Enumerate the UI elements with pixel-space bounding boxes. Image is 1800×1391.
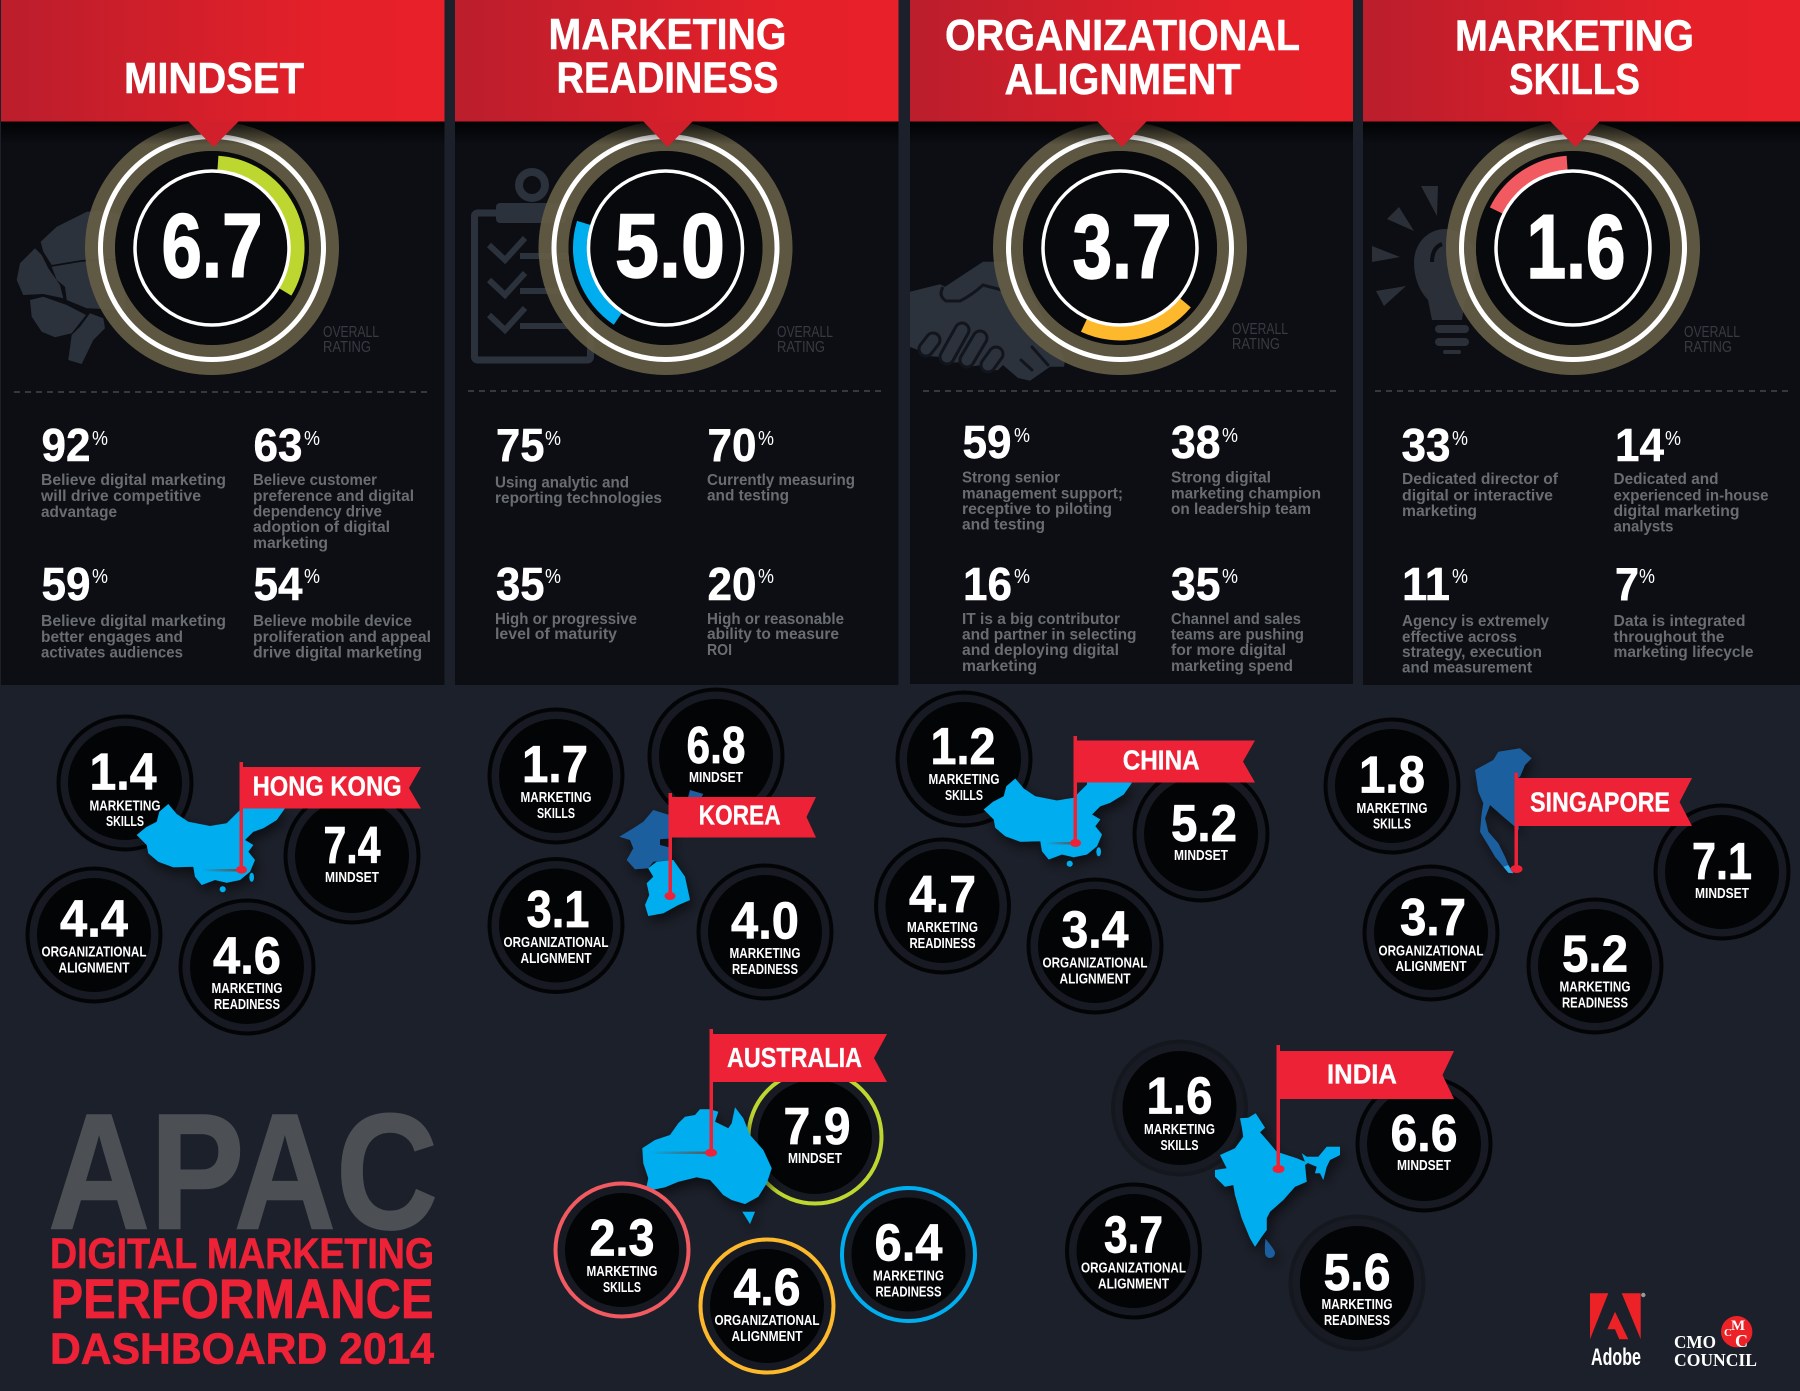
badge: marketing readiness 6.4: MARKETING <box>873 1268 944 1284</box>
stat: 63%: adoption of digital <box>253 519 390 536</box>
stat: 35% <box>495 558 637 643</box>
stat: 59%: Strong senior <box>962 470 1060 486</box>
stat: 38%: 38 <box>1171 416 1220 468</box>
badge: organizational alignment 4.4: 4.4 <box>60 890 128 948</box>
flag: China <box>1070 736 1255 847</box>
badge: marketing skills 1.4: 1.4 <box>90 744 157 802</box>
stat: 20%: % <box>758 566 774 588</box>
badge: marketing readiness 4.6: READINESS <box>214 997 280 1013</box>
panel: marketing readiness <box>455 0 898 685</box>
badge: marketing skills 1.6: MARKETING <box>1144 1122 1215 1138</box>
stat: 59%: better engages and <box>41 629 183 646</box>
badge: organizational alignment 3.7 <box>1362 864 1500 1002</box>
badge: organizational alignment 3.7: ORGANIZATIONAL <box>1081 1260 1186 1276</box>
stat: 20%: ability to measure <box>707 626 839 643</box>
badge: marketing skills 2.3: 2.3 <box>590 1210 654 1268</box>
stat: 16%: % <box>1014 566 1030 588</box>
stat: 11% <box>1402 558 1549 676</box>
overall rating label: RATING <box>777 339 825 356</box>
country: China <box>874 690 1270 1014</box>
stat: 63%: dependency drive <box>253 504 382 520</box>
badge: organizational alignment 3.1 <box>488 857 624 994</box>
stat: 70%: 70 <box>708 419 756 471</box>
rating gauge: 1.6: 1.6 <box>1526 197 1626 298</box>
overall rating label: RATING <box>323 339 371 356</box>
header: marketing skills: MARKETING <box>1455 12 1694 60</box>
country: Hong Kong <box>26 714 421 1036</box>
logo: CMO Council <box>1674 1316 1757 1370</box>
flag: Singapore: SINGAPORE <box>1530 787 1670 818</box>
badge: marketing skills 2.3 <box>554 1182 690 1318</box>
stat: 92%: % <box>92 428 108 450</box>
badge: mindset 6.6: 6.6 <box>1390 1105 1458 1163</box>
stat: 70%: and testing <box>707 488 789 504</box>
panel: organizational alignment <box>910 0 1353 684</box>
badge: organizational alignment 3.7: 3.7 <box>1400 889 1466 947</box>
title: APAC: APAC <box>48 1080 438 1264</box>
stat: 63%: preference and digital <box>253 488 414 505</box>
badge: mindset 5.2: MINDSET <box>1174 848 1228 864</box>
stat: 38%: % <box>1222 425 1238 447</box>
stat: 54%: 54 <box>254 558 303 610</box>
stat: 38% <box>1171 416 1321 518</box>
overall rating label: OVERALL <box>1232 321 1288 338</box>
badge: marketing skills 1.4: SKILLS <box>106 814 144 830</box>
badge: marketing readiness 4.0: 4.0 <box>731 892 799 950</box>
badge: marketing readiness 6.4: 6.4 <box>874 1214 943 1272</box>
overall rating label: OVERALL <box>323 324 379 341</box>
stat: 14%: analysts <box>1614 518 1674 536</box>
logo: Adobe <box>1590 1293 1646 1371</box>
flag: Hong Kong: HONG KONG <box>253 770 402 802</box>
badge: organizational alignment 4.4: ALIGNMENT <box>58 960 130 976</box>
badge: marketing skills 1.8: 1.8 <box>1359 746 1425 804</box>
stat: 35%: for more digital <box>1171 642 1286 659</box>
stat: 33% <box>1402 419 1559 520</box>
badge: organizational alignment 3.4: ALIGNMENT <box>1060 972 1131 988</box>
badge: mindset 7.1 <box>1654 804 1790 940</box>
badge: marketing readiness 5.6: 5.6 <box>1324 1244 1390 1302</box>
badge: mindset 6.8: 6.8 <box>686 717 746 775</box>
stat: 16% <box>962 558 1136 675</box>
badge: marketing readiness 4.6: 4.6 <box>213 928 281 986</box>
badge: organizational alignment 3.7: ALIGNMENT <box>1098 1276 1169 1292</box>
badge: marketing readiness 4.7: MARKETING <box>907 920 978 936</box>
badge: organizational alignment 3.1: 3.1 <box>526 881 590 939</box>
stat: 14%: % <box>1665 428 1681 450</box>
stat: 35%: % <box>1222 566 1238 588</box>
stat: 54%: proliferation and appeal <box>253 629 431 646</box>
panel: marketing skills <box>1363 0 1800 685</box>
map: India <box>1215 1113 1340 1258</box>
country: Korea <box>488 688 834 1000</box>
badge: marketing skills 1.6: SKILLS <box>1160 1138 1199 1154</box>
badge: mindset 7.4: 7.4 <box>323 817 381 875</box>
badge: organizational alignment 3.4 <box>1026 878 1164 1014</box>
badge: marketing readiness 4.6 <box>178 898 316 1036</box>
stat: 92%: Believe digital marketing <box>41 472 226 489</box>
stat: 92%: advantage <box>41 504 117 521</box>
stat: 54%: % <box>304 566 320 588</box>
logo: CMO Council: CMO <box>1674 1332 1716 1352</box>
stat: 16%: IT is a big contributor <box>962 611 1120 628</box>
badge: marketing skills 1.8: SKILLS <box>1373 816 1411 832</box>
map: China <box>984 778 1132 867</box>
badge: marketing skills 1.6 <box>1111 1040 1248 1176</box>
stat: 59%: receptive to piloting <box>962 501 1112 518</box>
stat: 59%: 59 <box>42 558 90 610</box>
header: marketing skills: SKILLS <box>1509 55 1640 104</box>
badge: organizational alignment 4.6 <box>698 1238 836 1374</box>
stat: 20% <box>707 558 844 659</box>
map: Korean peninsula <box>619 790 703 916</box>
stat: 35%: Channel and sales <box>1171 611 1301 628</box>
stat: 75%: Using analytic and <box>495 474 629 492</box>
badge: organizational alignment 4.6: ALIGNMENT <box>732 1329 803 1345</box>
stat: 38%: Strong digital <box>1171 470 1271 486</box>
stat: 59%: 59 <box>962 416 1012 468</box>
country: Singapore <box>1324 718 1790 1034</box>
badge: mindset 7.4: MINDSET <box>325 870 379 886</box>
panel: mindset <box>1 0 444 685</box>
country: Australia <box>554 1029 977 1374</box>
stat: 20%: ROI <box>707 642 732 659</box>
badge: mindset 7.1: 7.1 <box>1692 833 1752 891</box>
badge: marketing readiness 5.6: READINESS <box>1324 1313 1390 1329</box>
stat: 92% <box>40 419 226 521</box>
badge: marketing skills 1.7 <box>488 708 624 844</box>
badge: mindset 7.4 <box>284 788 420 924</box>
badge: marketing readiness 4.7 <box>874 838 1011 974</box>
stat: 7% <box>1614 558 1754 661</box>
stat: 70%: Currently measuring <box>707 472 855 489</box>
stat: 59%: activates audiences <box>41 644 183 662</box>
header: organizational alignment: ORGANIZATIONAL <box>945 11 1300 60</box>
icon: handshake <box>910 262 1065 381</box>
rating gauge: 3.7: 3.7 <box>1072 197 1172 298</box>
header: mindset: MINDSET <box>124 54 304 103</box>
badge: marketing skills 2.3: MARKETING <box>586 1264 658 1280</box>
badge: mindset 5.2: 5.2 <box>1171 795 1237 853</box>
badge: organizational alignment 3.7: ORGANIZATIONAL <box>1378 944 1484 960</box>
stat: 38%: marketing champion <box>1171 486 1321 502</box>
badge: marketing readiness 6.4: READINESS <box>876 1284 942 1300</box>
badge: marketing readiness 4.0: READINESS <box>732 962 798 978</box>
flag: Korea: KOREA <box>699 800 781 830</box>
stat: 20%: 20 <box>708 558 756 610</box>
stat: 35%: level of maturity <box>495 626 617 643</box>
badge: marketing skills 1.2 <box>896 690 1032 828</box>
badge: mindset 6.8 <box>648 688 784 824</box>
badge: organizational alignment 4.4: ORGANIZATIONAL <box>42 944 147 960</box>
icon: clipboard <box>474 172 590 360</box>
badge: marketing readiness 4.6: MARKETING <box>212 981 282 997</box>
badge: marketing readiness 4.0: MARKETING <box>730 946 800 962</box>
overall rating label <box>1232 321 1288 353</box>
icon: light bulb <box>1372 186 1476 354</box>
stat: 54%: Believe mobile device <box>253 613 412 630</box>
badge: organizational alignment 3.7: ALIGNMENT <box>1396 959 1467 975</box>
stat: 35%: % <box>545 566 561 588</box>
stat: 7%: % <box>1639 566 1655 588</box>
stat: 59%: % <box>1014 425 1030 447</box>
stat: 35%: 35 <box>496 558 544 610</box>
map: Thailand and Malay peninsula <box>1475 748 1532 873</box>
stat: 7%: throughout the <box>1614 629 1725 646</box>
badge: organizational alignment 3.1: ORGANIZATIONAL <box>504 935 609 951</box>
map pin shadow line <box>202 869 238 872</box>
badge: marketing readiness 6.4 <box>840 1186 977 1323</box>
flag: Australia: AUSTRALIA <box>727 1042 862 1073</box>
stat: 59% <box>962 416 1123 534</box>
stat: 14%: Dedicated and <box>1614 471 1718 488</box>
flag: Hong Kong <box>236 762 421 874</box>
badge: organizational alignment 3.4: ORGANIZATIONAL <box>1042 956 1148 972</box>
icon: brain <box>17 211 125 364</box>
flag: China: CHINA <box>1123 745 1200 776</box>
overall rating label: RATING <box>1684 339 1732 356</box>
badge: mindset 6.8: MINDSET <box>689 770 743 786</box>
stat: 11%: effective across <box>1402 629 1517 646</box>
stat: 20%: High or reasonable <box>707 611 844 628</box>
badge: mindset 5.2 <box>1132 766 1270 902</box>
stat: 59%: Believe digital marketing <box>41 613 226 630</box>
flag: Australia <box>705 1029 887 1157</box>
stat: 14%: experienced in-house <box>1614 488 1769 504</box>
header: organizational alignment <box>910 0 1353 147</box>
badge: marketing skills 1.6: 1.6 <box>1146 1068 1212 1126</box>
badge: mindset 6.6 <box>1356 1076 1492 1212</box>
stat: 63%: 63 <box>254 419 302 471</box>
stat: 14% <box>1614 419 1769 536</box>
map pin shadow line <box>1046 842 1074 844</box>
stat: 14%: 14 <box>1615 419 1664 471</box>
logo: CMO Council: C <box>1735 1331 1748 1351</box>
stat: 59%: and testing <box>962 516 1045 534</box>
stat: 16%: and partner in selecting <box>962 626 1136 644</box>
stat: 38%: on leadership team <box>1171 501 1311 518</box>
stat: 33%: digital or interactive <box>1402 488 1553 504</box>
stat: 35%: marketing spend <box>1171 658 1293 675</box>
logo: CMO Council: M <box>1731 1318 1745 1334</box>
stat: 7%: Data is integrated <box>1614 613 1746 630</box>
overall rating label <box>777 324 833 356</box>
stat: 63%: marketing <box>253 535 328 552</box>
badge: marketing readiness 5.2: 5.2 <box>1562 926 1628 984</box>
badge: marketing skills 1.4 <box>56 714 194 852</box>
logo: CMO Council: C <box>1724 1327 1732 1339</box>
logo: Adobe: Adobe <box>1591 1344 1641 1371</box>
header: marketing readiness: READINESS <box>556 54 778 102</box>
stat: 75%: reporting technologies <box>495 490 662 507</box>
stat: 63%: Believe customer <box>253 472 377 489</box>
badge: marketing skills 1.8 <box>1324 718 1460 854</box>
stat: 11%: Agency is extremely <box>1402 613 1549 630</box>
badge: marketing readiness 5.6: MARKETING <box>1322 1297 1392 1313</box>
stat: 11%: and measurement <box>1402 660 1533 676</box>
stat: 7%: marketing lifecycle <box>1614 644 1754 661</box>
stat: 63% <box>253 419 414 552</box>
stat: 63%: % <box>304 428 320 450</box>
stat: 33%: Dedicated director of <box>1402 471 1559 488</box>
country: India <box>1065 1040 1492 1352</box>
subtitle: digital marketing: DIGITAL MARKETING <box>50 1230 434 1278</box>
badge: marketing skills 1.2: 1.2 <box>930 718 996 776</box>
badge: marketing skills 1.7: SKILLS <box>537 806 575 822</box>
map: China with Hong Kong pin <box>137 804 285 892</box>
subtitle: performance: PERFORMANCE <box>50 1267 434 1330</box>
rating gauge: 6.7: 6.7 <box>162 196 262 297</box>
badge: marketing readiness 5.6 <box>1288 1214 1426 1352</box>
badge: organizational alignment 4.4 <box>26 866 162 1004</box>
header: mindset <box>1 0 444 147</box>
badge: marketing skills 1.8: MARKETING <box>1356 801 1428 817</box>
rating gauge: 5.0 <box>554 136 778 360</box>
stat: 7%: 7 <box>1615 558 1639 610</box>
map: Australia <box>642 1107 772 1224</box>
badge: marketing readiness 5.2 <box>1526 898 1664 1034</box>
stat: 59% <box>41 558 226 662</box>
stat: 75%: % <box>545 428 561 450</box>
stat: 70% <box>707 419 855 504</box>
stat: 11%: 11 <box>1402 558 1450 610</box>
badge: marketing readiness 4.0 <box>696 864 834 1000</box>
flag: India <box>1272 1045 1454 1173</box>
badge: marketing readiness 5.2: READINESS <box>1562 996 1628 1012</box>
stat: 54%: drive digital marketing <box>253 644 422 662</box>
stat: 59%: % <box>92 566 108 588</box>
badge: mindset 7.1: MINDSET <box>1695 886 1749 902</box>
stat: 33%: marketing <box>1402 503 1477 520</box>
stat: 35% <box>1171 558 1304 675</box>
rating gauge: 5.0: 5.0 <box>615 196 725 297</box>
stat: 75%: 75 <box>496 419 544 471</box>
stat: 11%: % <box>1452 566 1468 588</box>
stat: 35%: High or progressive <box>495 611 637 628</box>
header: organizational alignment: ALIGNMENT <box>1004 55 1241 104</box>
overall rating label: OVERALL <box>1684 324 1740 341</box>
badge: marketing skills 1.2: SKILLS <box>945 788 983 804</box>
overall rating label: RATING <box>1232 336 1280 353</box>
badge: marketing readiness 5.2: MARKETING <box>1560 980 1630 996</box>
stat: 33%: % <box>1452 428 1468 450</box>
overall rating label: OVERALL <box>777 324 833 341</box>
badge: mindset 7.9 <box>746 1068 884 1206</box>
badge: organizational alignment 3.7: 3.7 <box>1104 1206 1163 1264</box>
badge: marketing skills 1.7: 1.7 <box>522 736 588 794</box>
badge: organizational alignment 3.4: 3.4 <box>1062 902 1129 960</box>
flag: India: INDIA <box>1327 1058 1397 1089</box>
badge: marketing skills 2.3: SKILLS <box>603 1280 641 1296</box>
flag: Korea <box>664 793 816 900</box>
overall rating label <box>323 324 379 356</box>
subtitle: dashboard 2014: DASHBOARD 2014 <box>50 1324 435 1374</box>
rating gauge: 1.6 <box>1461 136 1685 360</box>
badge: mindset 7.9: MINDSET <box>788 1151 842 1167</box>
badge: marketing readiness 4.7: READINESS <box>910 936 976 952</box>
stat: 16%: and deploying digital <box>962 642 1119 659</box>
stat: 70%: % <box>758 428 774 450</box>
badge: organizational alignment 3.7 <box>1065 1182 1202 1320</box>
stat: 14%: digital marketing <box>1614 503 1740 520</box>
stat: 75% <box>495 419 662 507</box>
stat: 92%: 92 <box>42 419 90 471</box>
stat: 33%: 33 <box>1402 419 1450 471</box>
badge: mindset 6.6: MINDSET <box>1397 1158 1451 1174</box>
header: marketing readiness: MARKETING <box>548 10 786 59</box>
stat: 35%: 35 <box>1171 558 1220 610</box>
badge: marketing readiness 4.7: 4.7 <box>909 866 976 924</box>
badge: mindset 7.9: 7.9 <box>784 1098 850 1156</box>
badge: organizational alignment 4.6: ORGANIZATIONAL <box>714 1313 820 1329</box>
badge: marketing skills 1.7: MARKETING <box>520 790 592 806</box>
stat: 16%: 16 <box>963 558 1012 610</box>
badge: organizational alignment 3.1: ALIGNMENT <box>520 951 592 967</box>
badge: marketing skills 1.4: MARKETING <box>90 798 160 814</box>
stat: 16%: marketing <box>962 658 1037 675</box>
header: marketing skills <box>1363 0 1800 147</box>
rating gauge: 6.7 <box>100 136 324 360</box>
flag: Singapore <box>1510 773 1692 873</box>
logo: CMO Council: COUNCIL <box>1674 1350 1757 1370</box>
header: marketing readiness <box>455 0 898 147</box>
map pin shadow line <box>650 1152 708 1154</box>
stat: 35%: teams are pushing <box>1171 626 1304 644</box>
badge: marketing skills 1.2: MARKETING <box>928 772 1000 788</box>
overall rating label <box>1684 324 1740 356</box>
stat: 54% <box>253 558 431 662</box>
title block <box>48 1080 438 1374</box>
rating gauge: 3.7 <box>1008 136 1232 360</box>
stat: 92%: will drive competitive <box>40 488 201 505</box>
stat: 11%: strategy, execution <box>1402 644 1542 661</box>
badge: organizational alignment 4.6: 4.6 <box>734 1259 800 1317</box>
stat: 59%: management support; <box>962 486 1123 502</box>
